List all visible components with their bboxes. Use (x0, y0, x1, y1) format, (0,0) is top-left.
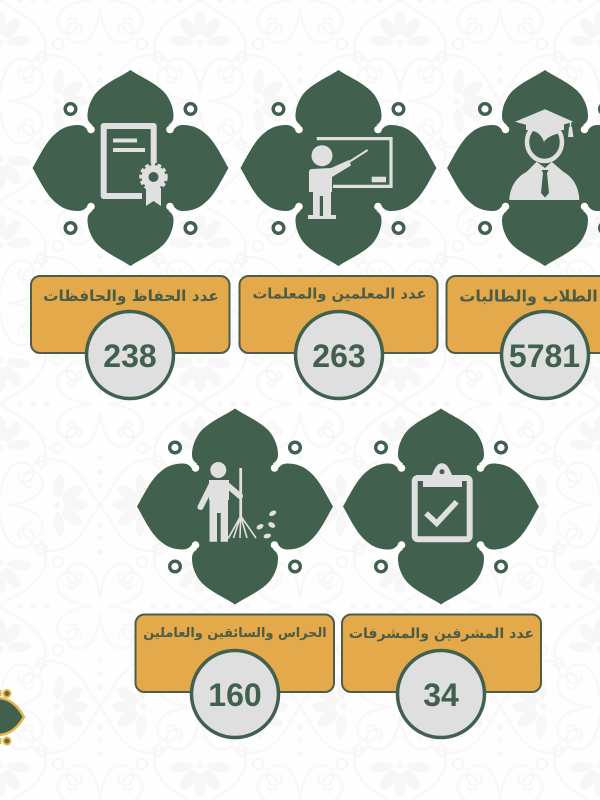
flower emblem: supervisors (343, 408, 539, 604)
label box: students (446, 276, 600, 353)
stat group: students (446, 70, 600, 398)
icon: graduate (509, 109, 579, 200)
number circle: 34 (398, 650, 484, 738)
number circle: 160 (192, 650, 278, 738)
decorative emblem: small gold-rimmed flower at left edge (0, 690, 24, 744)
label: supervisors: عدد المشرفين والمشرفات (349, 626, 534, 642)
label box: supervisors (342, 614, 541, 692)
label: memorizers: عدد الحفاظ والحافظات (43, 287, 219, 305)
flower emblem: memorizers (32, 70, 228, 266)
number circle: 263: 263 (312, 338, 366, 374)
number circle: 238: 238 (103, 338, 157, 374)
stat group: certified memorizers (31, 70, 230, 398)
number circle: 238 (86, 312, 174, 398)
flower emblem: workers (137, 408, 333, 604)
icon: clipboard with check (415, 463, 470, 539)
icon: teacher at board (308, 139, 391, 219)
label box: teachers (240, 276, 438, 353)
icon: certificate (104, 126, 166, 206)
number circle: 160: 160 (208, 677, 262, 713)
stat group: teachers (240, 70, 438, 398)
label: workers: الحراس والسائقين والعاملين (143, 626, 327, 641)
number circle: 263 (296, 312, 382, 398)
icon: sweeper with rake (200, 462, 277, 542)
label box: memorizers (31, 276, 230, 353)
stat group: supervisors (342, 408, 541, 738)
flower emblem: teachers (240, 70, 436, 266)
number circle: 34: 34 (423, 677, 459, 713)
number circle: 5781 (502, 312, 588, 398)
label box: workers (136, 614, 334, 692)
stat group: guards, drivers and workers (136, 408, 334, 738)
flower emblem: students (447, 70, 600, 266)
label: teachers: عدد المعلمين والمعلمات (253, 286, 426, 302)
number circle: 5781: 5781 (509, 338, 580, 374)
